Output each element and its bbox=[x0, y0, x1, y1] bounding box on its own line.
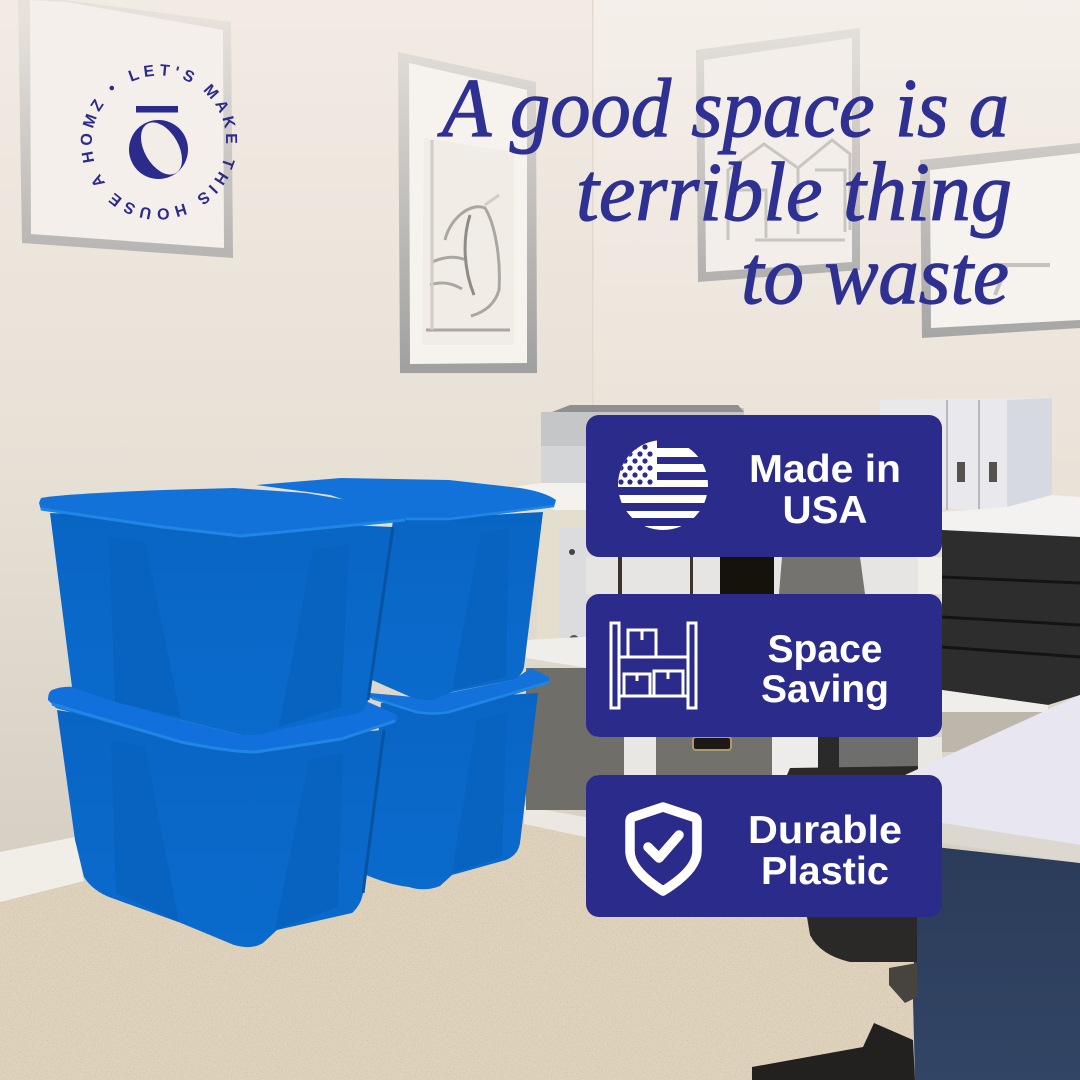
chair base bbox=[752, 917, 917, 1080]
frame: right bbox=[920, 143, 1080, 338]
carpet floor bbox=[0, 823, 920, 1080]
label: Made in bbox=[749, 448, 901, 491]
label: USA bbox=[782, 489, 868, 532]
badge: space saving bbox=[586, 594, 942, 737]
title: to waste bbox=[741, 229, 1009, 322]
logo badge bbox=[80, 64, 238, 220]
storage bin: front bottom bbox=[48, 687, 397, 947]
logo mark bbox=[129, 106, 190, 182]
desk bbox=[905, 695, 1080, 1080]
frame: top left bbox=[18, 0, 233, 258]
label: Space bbox=[768, 628, 882, 671]
strip between badges 2 and 3 bbox=[586, 737, 942, 775]
desk shelving and office furniture bbox=[505, 398, 1080, 1080]
strip between badges 1 and 2 bbox=[586, 557, 942, 594]
icon: shelving with boxes bbox=[611, 623, 696, 708]
storage bin: back top bbox=[256, 478, 556, 700]
storage bin: back bottom bbox=[366, 668, 549, 889]
label: Plastic bbox=[761, 850, 889, 893]
binders bbox=[880, 398, 1052, 510]
storage bin: front top bbox=[39, 488, 406, 735]
left shelf unit bbox=[505, 483, 600, 810]
title: terrible thing bbox=[576, 146, 1012, 239]
icon: american flag bbox=[618, 440, 708, 530]
badge: made in USA bbox=[586, 415, 942, 557]
printer bbox=[541, 405, 744, 483]
badge: durable plastic bbox=[586, 775, 942, 917]
label: Saving bbox=[761, 668, 889, 711]
right shelf and black cabinet bbox=[942, 495, 1080, 752]
baseboard left bbox=[0, 837, 84, 902]
baseboard right bbox=[524, 806, 590, 838]
circular tagline: LET'S MAKE THIS HOUSE A HOMZ • bbox=[80, 64, 238, 220]
title: A good space is a bbox=[437, 62, 1009, 155]
frame: sketch bbox=[398, 52, 537, 373]
wall frames bbox=[18, 0, 1080, 373]
label: Durable bbox=[748, 809, 902, 852]
frame: house sketch bbox=[696, 28, 860, 282]
icon: shield with check bbox=[630, 807, 697, 891]
title bbox=[437, 62, 1012, 322]
